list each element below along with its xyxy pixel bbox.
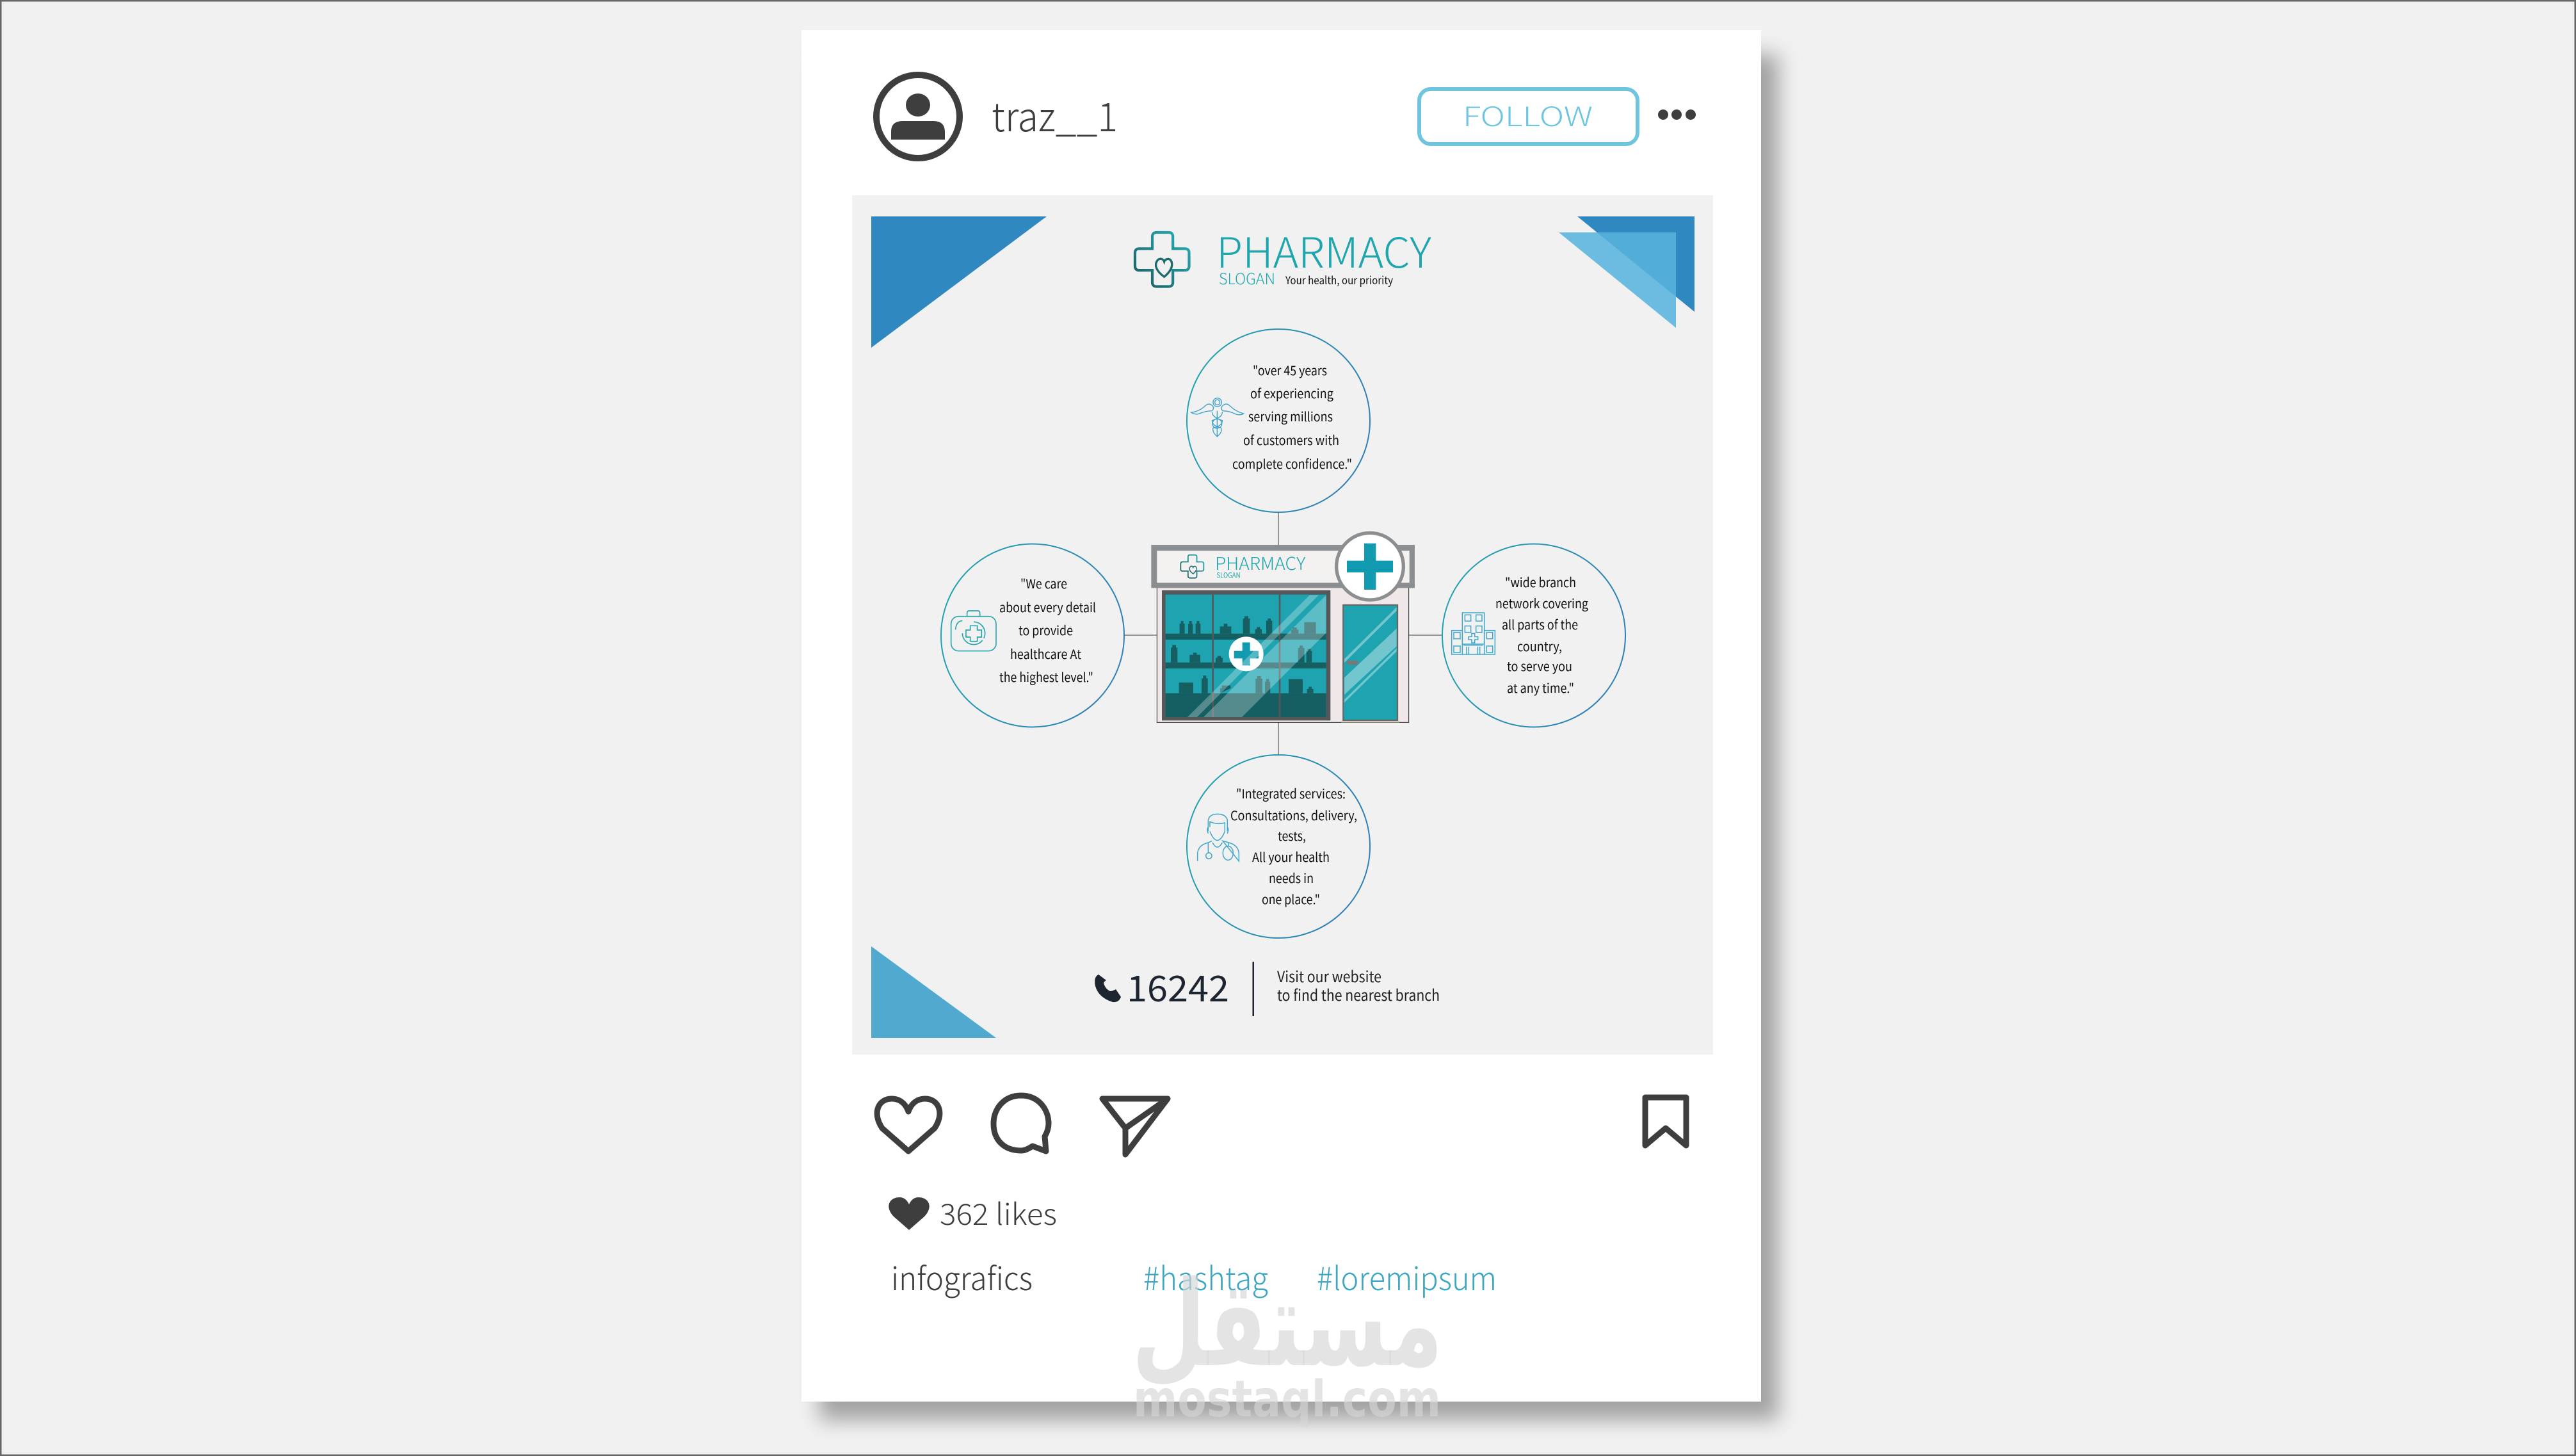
text: care: to provide [1018, 620, 1073, 639]
text: experience: serving millions [1248, 407, 1333, 425]
decorative triangles top right [1559, 216, 1695, 328]
logo slogan: SLOGAN [1219, 266, 1275, 289]
text: integrated services: Consultations, delivery, [1230, 805, 1357, 824]
icon: profile avatar [876, 75, 960, 158]
icon: sign logo [1180, 555, 1203, 578]
text: integrated services: tests, [1278, 826, 1306, 845]
logo tagline: Your health, our priority [1285, 271, 1393, 287]
decorative triangle top left [871, 216, 1047, 348]
round plus sign in window [1229, 636, 1264, 671]
icon: cross with heart [1135, 232, 1189, 287]
panel: infographic image [852, 195, 1713, 1055]
circle: integrated services [1187, 755, 1370, 938]
text: branch network: at any time." [1507, 678, 1574, 697]
phone number: 16242 [1127, 960, 1229, 1012]
icon: bookmark [1645, 1097, 1686, 1145]
circle: care [941, 544, 1124, 727]
icon: hospital [1452, 613, 1495, 654]
icon: medical kit [951, 611, 996, 651]
building wall [1157, 585, 1409, 722]
username: traz__1 [992, 85, 1118, 143]
website note: to find the nearest branch [1277, 983, 1440, 1005]
post card [801, 30, 1761, 1402]
circle: experience [1187, 329, 1370, 512]
storefront illustration [1151, 533, 1415, 722]
icon: phone [1095, 975, 1121, 1002]
text: integrated services: All your health [1252, 847, 1330, 866]
follow button [1419, 89, 1638, 144]
icon: comment bubble [994, 1096, 1049, 1151]
contact row [1095, 960, 1440, 1016]
text: experience [1232, 360, 1352, 473]
likes count: 362 likes [940, 1192, 1057, 1234]
text: experience: of customers with [1243, 430, 1339, 449]
follow button: FOLLOW [1463, 95, 1593, 134]
text: experience: complete confidence." [1232, 454, 1352, 473]
icon: caduceus [1191, 398, 1244, 437]
icon: doctor [1198, 814, 1239, 861]
logo wordmark: PHARMACY [1216, 220, 1431, 280]
icon: like heart [877, 1099, 940, 1151]
text: integrated services: one place." [1262, 889, 1320, 908]
watermark [1132, 1255, 1443, 1428]
watermark: مستقل [1132, 1255, 1443, 1393]
icon: send arrow [1102, 1099, 1168, 1154]
website note: Visit our website [1277, 964, 1381, 987]
post header [876, 75, 1696, 158]
post actions [877, 1096, 1686, 1154]
icon: more options dots [1658, 109, 1696, 120]
card shadow [819, 54, 1778, 1420]
text: branch network: to serve you [1507, 656, 1572, 675]
pharmacy logo [1135, 220, 1431, 289]
text: care: healthcare At [1010, 644, 1081, 663]
text: care: "We care [1020, 574, 1067, 592]
text: integrated services: "Integrated services: [1236, 784, 1346, 802]
shop sign [1151, 545, 1415, 588]
likes row [889, 1192, 1057, 1234]
hashtag: #hashtag [1143, 1254, 1268, 1300]
circle: branch network [1442, 544, 1625, 727]
text: branch network: all parts of the [1502, 615, 1578, 633]
shop sign: SLOGAN [1216, 569, 1241, 580]
text: care: the highest level." [999, 667, 1093, 686]
shop sign: PHARMACY [1215, 549, 1306, 575]
text: branch network: network covering [1495, 594, 1588, 612]
text: branch network [1495, 572, 1588, 697]
caption: infografics [891, 1254, 1033, 1300]
hashtag: #loremipsum [1317, 1254, 1497, 1300]
icon: filled heart [889, 1197, 930, 1230]
decorative triangle bottom left [871, 946, 996, 1038]
text: care [999, 574, 1096, 686]
text: integrated services [1230, 784, 1357, 908]
connector lines [1124, 512, 1442, 755]
text: branch network: "wide branch [1505, 572, 1576, 591]
text: experience: of experiencing [1250, 384, 1333, 402]
text: experience: "over 45 years [1253, 360, 1327, 379]
window [1162, 590, 1330, 720]
website note [1277, 964, 1440, 1005]
text: branch network: country, [1517, 636, 1562, 655]
door [1341, 605, 1399, 722]
text: integrated services: needs in [1269, 868, 1314, 887]
watermark: mostaql.com [1133, 1371, 1441, 1428]
text: care: about every detail [999, 597, 1096, 616]
round plus badge [1337, 533, 1403, 600]
